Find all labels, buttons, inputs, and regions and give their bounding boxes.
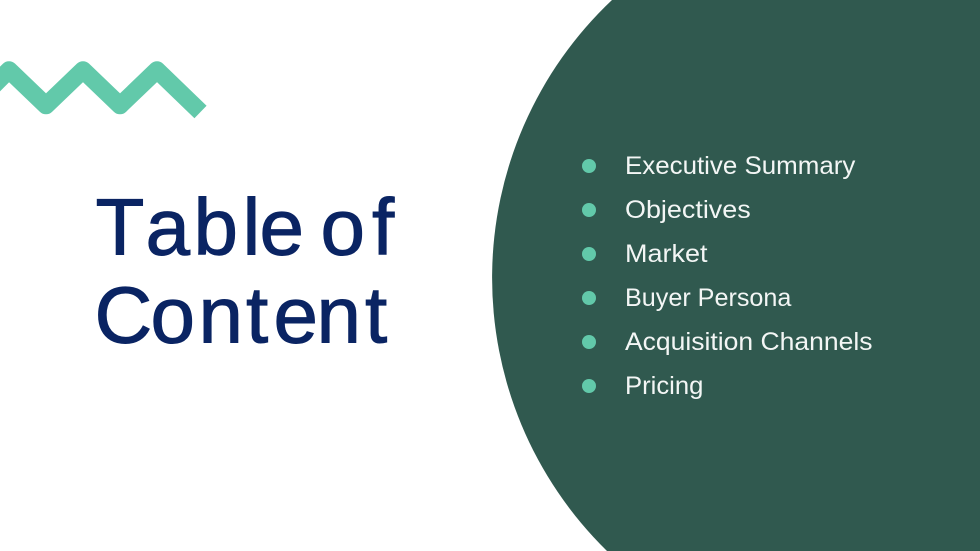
item: Pricing [582,372,703,400]
list: table of contents [582,152,872,400]
item: Buyer Persona: Buyer Persona [625,284,791,312]
item: Objectives: Objectives [625,196,751,224]
title: Table of [96,182,395,272]
title [94,182,395,360]
item: Market [582,240,708,268]
item: Market: Market [625,240,708,268]
zigzag decoration [0,61,206,118]
title: Content [94,270,387,360]
item: Executive Summary: Executive Summary [625,152,855,180]
item: Pricing: Pricing [625,372,703,400]
item: Acquisition Channels: Acquisition Channels [625,328,872,356]
